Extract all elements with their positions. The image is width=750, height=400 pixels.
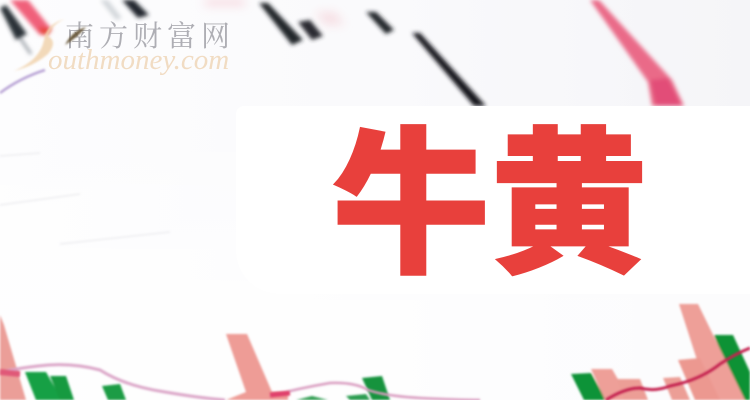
white title panel	[236, 106, 750, 294]
logo bird accent	[64, 26, 87, 46]
logo mark: orange swoosh	[16, 20, 62, 71]
faint pink marks	[205, 0, 345, 25]
moving average line	[0, 348, 750, 400]
logo English name: outhmoney.com	[48, 44, 229, 76]
top candlesticks	[0, 0, 486, 106]
faint grey streaks	[0, 153, 170, 244]
title: 牛黄	[332, 77, 648, 306]
logo: southmoney watermark	[16, 14, 235, 76]
red trend candle	[590, 0, 684, 106]
bottom candles	[0, 304, 750, 400]
purple line	[0, 70, 45, 93]
logo Chinese name: 南方财富网	[65, 14, 235, 55]
